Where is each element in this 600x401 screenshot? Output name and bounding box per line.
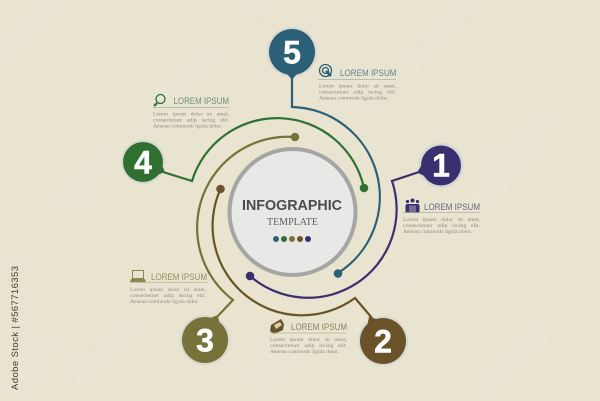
text block 5: Aenean commodo ligula dolor. — [319, 96, 389, 102]
text block 1: LOREM IPSUM — [424, 202, 480, 212]
text block 3: Lorem ipsum dolor sit amet, — [130, 287, 207, 293]
step 3: line and badge: 3 — [196, 322, 214, 358]
text block 3: consectetuer adip iscing elit. — [130, 293, 207, 299]
step 5: line and badge — [267, 27, 380, 278]
text: Stock — [62, 309, 143, 390]
text block 3 — [130, 270, 207, 305]
step 2: line and badge: 2 — [374, 324, 392, 360]
text: Adobe — [47, 131, 136, 220]
text: Adobe — [462, 131, 551, 220]
icon: book — [270, 319, 284, 334]
text block 4: LOREM IPSUM — [174, 96, 229, 106]
text: Stock — [262, 114, 343, 195]
text: Adobe — [242, 311, 331, 400]
text block 4: Lorem ipsum dolor sit amet, — [153, 112, 230, 118]
text block 3: LOREM IPSUM — [151, 272, 207, 282]
center title: INFOGRAPHIC — [242, 198, 343, 214]
step 4: line and badge: 4 — [134, 144, 152, 180]
text block 1 — [403, 198, 481, 235]
text block 2 — [270, 319, 348, 355]
step 1: line and badge — [246, 143, 464, 298]
text block 2: LOREM IPSUM — [291, 322, 347, 332]
text: Stock — [482, 99, 563, 180]
colour dots — [273, 236, 311, 242]
step 2: line and badge — [213, 185, 408, 366]
text block 5: LOREM IPSUM — [340, 68, 396, 78]
text block 4: Aenean commodo ligula dolor. — [153, 124, 223, 130]
text block 1: Lorem ipsum dolor sit amet, — [403, 217, 481, 223]
text block 3: Aenean commodo ligula dolor. — [130, 299, 200, 305]
step 4: line and badge — [121, 118, 368, 192]
text block 2: Lorem ipsum dolor sit amet, — [270, 337, 348, 343]
icon: target cursor — [320, 64, 332, 76]
text: Stock — [147, 34, 228, 115]
step 1: line and badge: 1 — [432, 148, 450, 184]
text block 1: Aenean commodo ligula dolor. — [403, 229, 473, 235]
icon: people — [406, 198, 420, 213]
step 3: line and badge — [180, 133, 299, 365]
text block 2: consectetuer adip iscing elit. — [270, 343, 348, 349]
icon: magnifier — [154, 94, 165, 106]
text block 4 — [153, 94, 230, 130]
text block 5: consectetuer adip iscing elit. — [319, 90, 397, 96]
text block 4: consectetuer adip iscing elit. — [153, 118, 230, 124]
text: Stock — [342, 259, 423, 340]
text block 5 — [318, 64, 397, 102]
center circle — [230, 149, 356, 275]
center subtitle: TEMPLATE — [267, 217, 318, 228]
vertical credit text: Adobe Stock | #567716353 — [10, 266, 21, 390]
step 5: line and badge: 5 — [283, 34, 301, 70]
text block 5: Lorem ipsum dolor sit amet, — [319, 84, 397, 90]
text: Stock — [472, 319, 553, 400]
icon: laptop — [130, 270, 146, 282]
text block 2: Aenean commodo ligula dolor. — [270, 349, 340, 355]
text block 1: consectetuer adip iscing elit. — [403, 223, 481, 229]
